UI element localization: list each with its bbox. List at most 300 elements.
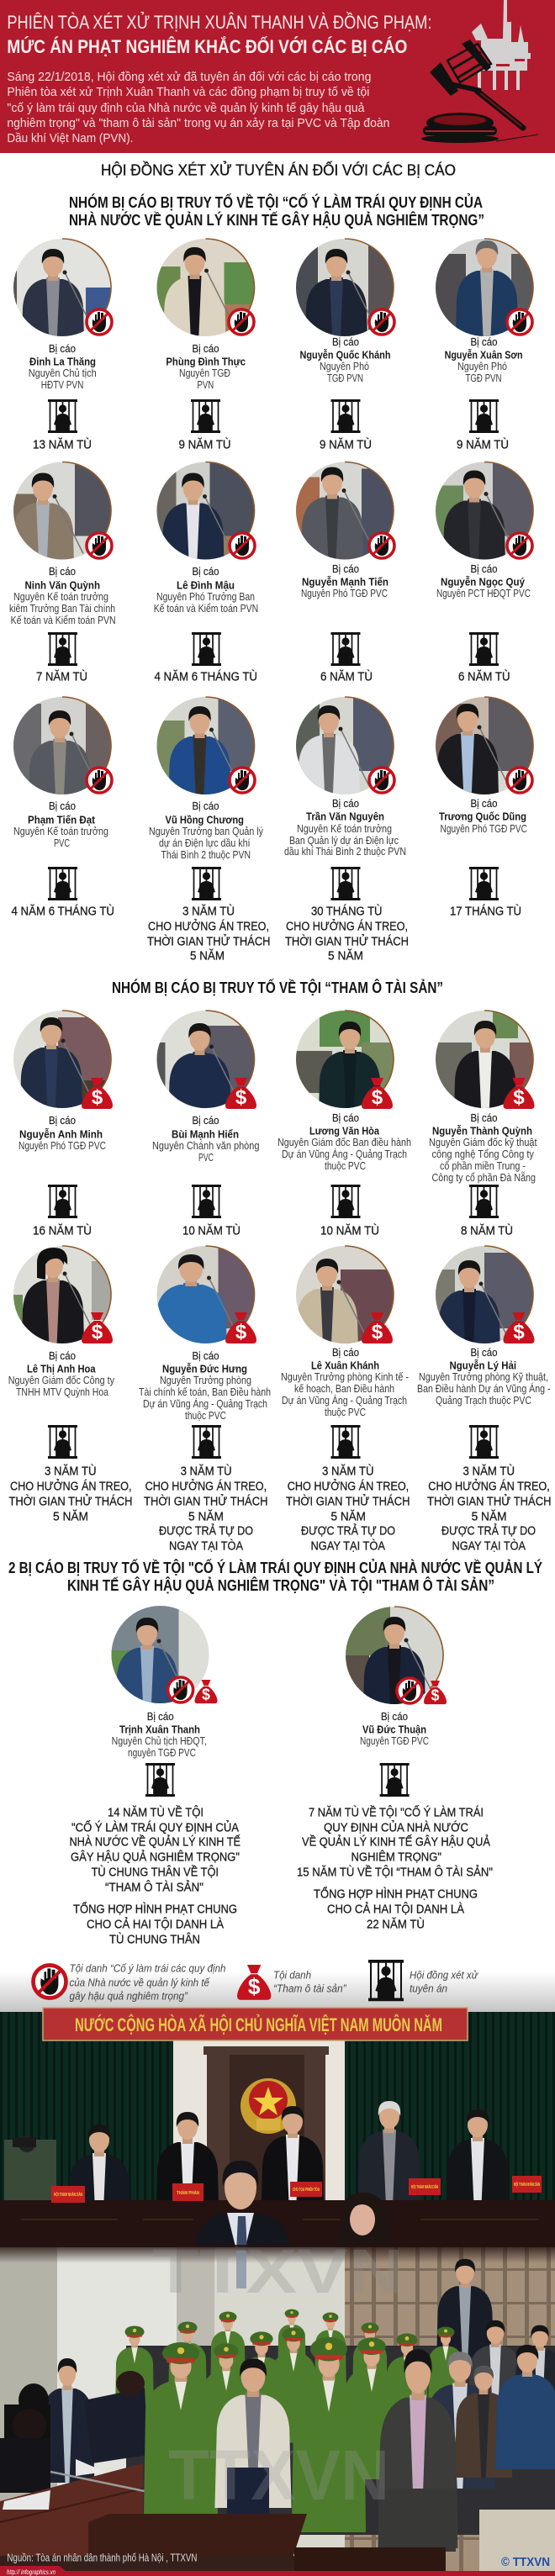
defendant text: Nguyên Kế toán trưởng <box>297 823 392 835</box>
defendant text: Công ty cổ phần Đà Nẵng <box>432 1171 536 1184</box>
card: Vũ Đức Thuận <box>297 1605 493 1932</box>
sentence: 9 NĂM TÙ <box>178 437 230 452</box>
defendant text: Bị cáo <box>49 343 76 355</box>
defendant text: Bị cáo <box>192 800 219 812</box>
sentence <box>144 1465 267 1554</box>
defendant text: thuộc PVC <box>325 1160 366 1172</box>
icon: money bag <box>82 1078 113 1109</box>
defendant text: Bị cáo <box>192 566 219 578</box>
sentence: 10 NĂM TÙ <box>320 1224 379 1238</box>
defendant text: Đinh La Thăng <box>29 355 96 368</box>
defendant text: Dự án Vũng Áng - Quảng Trạch <box>282 1394 407 1407</box>
defendant text: Bị cáo <box>192 343 219 355</box>
banner: national slogan <box>43 2008 468 2040</box>
sentence: NGAY TẠI TÒA <box>169 1539 243 1554</box>
card: Nguyễn Xuân Sơn <box>434 237 535 452</box>
icon: jail <box>192 1425 221 1459</box>
portrait <box>296 696 394 794</box>
defendant text: Nguyên Phó <box>457 361 507 372</box>
icon: jail legend <box>368 1960 404 2001</box>
sentence: TÙ CHUNG THÂN <box>109 1932 200 1947</box>
sentence: 4 NĂM 6 THÁNG TÙ <box>12 905 114 918</box>
portrait <box>109 1604 210 1742</box>
heading: group 1: NHÓM BỊ CÁO BỊ TRUY TỐ VỀ TỘI “CỐ Ý LÀM TRÁI QUY ĐỊNH CỦA <box>69 193 483 211</box>
defendant text: cổ phần miền Trung - <box>440 1160 526 1172</box>
card: Ninh Văn Quỳnh <box>9 461 116 684</box>
card: Lê Đình Mậu <box>154 461 258 684</box>
sentence: THỜI GIAN THỬ THÁCH <box>285 933 409 948</box>
icon: jail <box>469 1425 499 1459</box>
sentence <box>8 1465 133 1523</box>
card: Trịnh Xuân Thanh <box>69 1604 240 1947</box>
sentence: 17 THÁNG TÙ <box>450 905 521 918</box>
defendant text: Bị cáo <box>471 563 498 575</box>
defendant text: Nguyễn Xuân Sơn <box>445 348 523 362</box>
defendant text: Bị cáo <box>49 1115 76 1127</box>
defendant text: Nguyên Trưởng ban Quản lý <box>149 826 264 837</box>
sentence: ĐƯỢC TRẢ TỰ DO <box>441 1523 536 1539</box>
sentence: 9 NĂM TÙ <box>457 437 509 452</box>
icon: money bag <box>362 1312 393 1343</box>
icon: jail <box>331 867 360 900</box>
defendant text: Tài chính kế toán, Ban Điều hành <box>139 1386 271 1398</box>
sentence <box>297 1804 493 1932</box>
defendant text: Nguyễn Mạnh Tiến <box>302 575 388 589</box>
intro paragraph: "cố ý làm trái quy định của Nhà nước về quản lý kinh tế gây hậu quả <box>7 102 365 115</box>
defendant text: PVC <box>198 1152 214 1164</box>
legend text: abuse of regulations: của Nhà nước về quản lý kinh tế <box>69 1976 210 1989</box>
defendant text: Kế toán và Kiểm toán PVN <box>11 615 116 626</box>
defendant text: Nguyên Chánh văn phòng <box>152 1140 260 1152</box>
footer strip <box>0 2566 555 2576</box>
portrait <box>13 1245 112 1343</box>
defendant text: Bị cáo <box>332 1347 359 1359</box>
heading: group 2: NHÓM BỊ CÁO BỊ TRUY TỐ VỀ TỘI “THAM Ô TÀI SẢN” <box>112 979 443 996</box>
sentence: TỔNG HỢP HÌNH PHẠT CHUNG <box>314 1887 478 1902</box>
defendant text: Nguyên Phó TGĐ PVC <box>301 588 388 599</box>
legend text: abuse of regulations: Tội danh “Cố ý làm trái các quy định <box>69 1962 225 1974</box>
icon: jail <box>331 1425 360 1459</box>
portrait <box>344 1605 445 1741</box>
defendant text <box>301 563 388 599</box>
defendant text: Ninh Văn Quỳnh <box>25 578 100 592</box>
source line: Nguồn: Tòa án nhân dân thành phố Hà Nội , TTXVN <box>7 2552 197 2564</box>
sentence: ĐƯỢC TRẢ TỰ DO <box>159 1523 253 1539</box>
defendant text <box>278 1112 411 1172</box>
sentence: 8 NĂM TÙ <box>461 1224 513 1238</box>
sentence: QUY ĐỊNH CỦA NHÀ NƯỚC <box>324 1819 468 1834</box>
defendant text <box>299 336 391 384</box>
sentence: ĐƯỢC TRẢ TỰ DO <box>301 1523 395 1539</box>
icon: no entry <box>230 768 255 793</box>
legend text: embezzlement: Tội danh <box>273 1969 311 1981</box>
defendant text: Nguyên Chủ tịch HĐQT, <box>112 1735 207 1747</box>
sentence: 15 NĂM TÙ VỀ TỘI “THAM Ô TÀI SẢN" <box>297 1865 493 1880</box>
portrait <box>436 1010 534 1108</box>
sentence: CHO CẢ HAI TỘI DANH LÀ <box>327 1902 464 1917</box>
defendant text: Nguyên TGĐ PVC <box>360 1735 429 1747</box>
defendant text: Nguyên Kế toán trưởng <box>13 826 108 837</box>
icon: no entry <box>87 309 112 335</box>
heading: group 1 <box>69 193 484 229</box>
icon: no entry <box>87 768 112 793</box>
defendant text <box>284 798 406 858</box>
defendant text: dự án Điện lực dầu khí <box>159 837 251 849</box>
sentence: CHO CẢ HAI TỘI DANH LÀ <box>87 1917 224 1932</box>
defendant text: Thái Bình 2 thuộc PVN <box>161 849 251 861</box>
defendant text <box>152 1115 260 1164</box>
defendant text: dầu khí Thái Bình 2 thuộc PVN <box>284 846 406 858</box>
defendant text: TGĐ PVN <box>466 372 501 384</box>
defendant text: Nguyên Phó TGĐ PVC <box>441 823 527 835</box>
icon: jail <box>192 632 221 666</box>
sentence: VỀ QUẢN LÝ KINH TẾ GÂY HẬU QUẢ <box>302 1834 490 1850</box>
intro paragraph: nghiêm trọng" và "tham ô tài sản" trong vụ án xảy ra tại PVC và Tập đoàn <box>7 117 389 130</box>
heading: group 1: NHÀ NƯỚC VỀ QUẢN LÝ KINH TẾ GÂY HẬU QUẢ NGHIÊM TRỌNG” <box>69 211 484 229</box>
card: Trần Văn Nguyên <box>284 695 409 963</box>
sentence: CHO HƯỞNG ÁN TREO, <box>145 1478 267 1493</box>
card: Đinh La Thăng <box>12 237 113 452</box>
defendant text: PVN <box>197 379 214 391</box>
sentence: 6 NĂM TÙ <box>320 669 373 684</box>
icon: no entry <box>230 533 255 558</box>
defendant text: Nguyên Kế toán trưởng <box>13 591 108 603</box>
defendant text <box>8 1350 115 1398</box>
icon: no entry legend <box>34 1966 66 1998</box>
sentence: NGHIÊM TRỌNG" <box>352 1850 441 1865</box>
defendant text: Bị cáo <box>332 336 359 348</box>
defendant text: Bị cáo <box>471 336 498 348</box>
defendant text: Bị cáo <box>192 1115 219 1127</box>
defendant text: Lê Xuân Khánh <box>311 1359 379 1372</box>
photo: defendants and police in court <box>0 2245 555 2576</box>
sentence: 3 NĂM TÙ <box>181 1465 232 1478</box>
defendant text <box>281 1347 409 1418</box>
portrait <box>436 238 534 336</box>
name plates: CHỦ TỌA PHIÊN TÒA <box>293 2186 320 2193</box>
sentence <box>69 1806 240 1947</box>
sentence: 30 THÁNG TÙ <box>311 905 382 918</box>
portrait <box>156 1010 256 1108</box>
defendant text: Vũ Hồng Chương <box>165 814 244 826</box>
portrait <box>13 461 112 560</box>
defendant text: Bị cáo <box>49 800 76 812</box>
portrait <box>156 461 256 560</box>
heading: court verdict: HỘI ĐỒNG XÉT XỬ TUYÊN ÁN ĐỐI VỚI CÁC BỊ CÁO <box>101 161 456 178</box>
icon: jail <box>48 867 77 900</box>
defendant text: Bùi Mạnh Hiển <box>172 1128 239 1140</box>
icon: money bag <box>503 1312 535 1343</box>
icon: jail <box>192 867 221 900</box>
icon: no entry <box>369 533 394 558</box>
icon: no entry <box>507 533 532 558</box>
sentence: THỜI GIAN THỬ THÁCH <box>147 933 271 948</box>
defendant text: Bị cáo <box>332 1112 359 1124</box>
icon: jail <box>48 1185 77 1218</box>
portrait <box>436 461 534 560</box>
defendant text <box>13 800 108 849</box>
defendant text: Nguyên Phó Trưởng Ban <box>156 591 255 603</box>
sentence: CHO HƯỞNG ÁN TREO, <box>148 918 269 933</box>
defendant text <box>166 343 246 391</box>
defendant text <box>149 800 264 861</box>
icon: money bag <box>195 1680 218 1703</box>
portrait <box>296 1010 394 1108</box>
portrait <box>13 1010 112 1108</box>
legend text: abuse of regulations <box>69 1962 225 2003</box>
icon: money bag <box>424 1681 447 1704</box>
icon: jail <box>48 632 77 666</box>
defendant text <box>439 798 527 835</box>
intro paragraph: Phiên tòa xét xử Trịnh Xuân Thanh và các đồng phạm bị truy tố về tội <box>7 86 369 99</box>
icon: money bag <box>503 1078 535 1109</box>
card: Lương Văn Hòa <box>278 1009 411 1238</box>
defendant text: PVC <box>54 837 70 849</box>
defendant text <box>139 1350 271 1422</box>
icon: money bag <box>225 1078 256 1109</box>
defendant text: Nguyên Giám đốc Ban điều hành <box>278 1137 411 1148</box>
legend text: abuse of regulations: gây hậu quả nghiêm trọng” <box>69 1989 188 2003</box>
icon: money bag <box>225 1312 256 1343</box>
name plates: THẨM PHÁN <box>177 2190 199 2196</box>
defendant text: Lê Đình Mậu <box>177 578 235 592</box>
defendant text: Nguyên TGĐ <box>179 367 230 379</box>
sentence: 5 NĂM <box>331 1510 366 1523</box>
card: Bùi Mạnh Hiển <box>152 1009 260 1238</box>
defendant text: Ban Quản lý dự án Điện lực <box>289 835 399 847</box>
sentence: 6 NĂM TÙ <box>458 669 510 684</box>
defendant text <box>429 1112 537 1184</box>
sentence: NGAY TẠI TÒA <box>311 1539 385 1554</box>
portrait <box>296 461 394 560</box>
sentence: 9 NĂM TÙ <box>320 437 372 452</box>
sentence: CHO HƯỞNG ÁN TREO, <box>286 918 408 933</box>
defendant text: Bị cáo <box>471 1112 498 1124</box>
defendant text: Bị cáo <box>192 1350 219 1362</box>
defendant text: Nguyên Giám đốc kỹ thuật <box>429 1137 537 1148</box>
sentence: TỔNG HỢP HÌNH PHẠT CHUNG <box>73 1902 237 1917</box>
defendant text: Bị cáo <box>332 563 359 575</box>
defendant text: Trịnh Xuân Thanh <box>119 1723 200 1735</box>
defendant text: Dự án Vũng Áng - Quảng Trạch <box>143 1397 267 1410</box>
sentence: THỜI GIAN THỬ THÁCH <box>8 1493 133 1508</box>
defendant text: thuộc PVC <box>325 1407 366 1418</box>
defendant text: Bị cáo <box>471 798 498 810</box>
defendant text: Nguyên Trưởng phòng <box>160 1375 251 1386</box>
name plates: HỘI THẨM NHÂN DÂN <box>54 2191 82 2198</box>
icon: no entry <box>369 768 394 793</box>
icon: oil rig and gavel <box>421 0 538 143</box>
defendant text <box>445 336 523 384</box>
sentence: NGAY TẠI TÒA <box>452 1539 526 1554</box>
portrait <box>13 696 112 794</box>
watermark top: TTXVN <box>152 2236 404 2306</box>
intro paragraph: Sáng 22/1/2018, Hội đồng xét xử đã tuyên án đối với các bị cáo trong <box>7 71 371 84</box>
defendant text: Trần Văn Nguyên <box>306 810 384 822</box>
icon: no entry <box>507 768 532 793</box>
icon: jail <box>48 1425 77 1459</box>
defendant text: Quảng Trạch thuộc PVC <box>436 1395 531 1407</box>
defendant text: Nguyên PCT HĐQT PVC <box>436 588 531 599</box>
defendant text: TNHH MTV Quỳnh Hoa <box>16 1386 108 1398</box>
portrait <box>296 238 394 336</box>
icon: no entry <box>229 309 254 335</box>
defendant text: Nguyễn Quốc Khánh <box>299 348 391 362</box>
sentence: 5 NĂM <box>53 1510 88 1523</box>
defendant text: Kế toán và Kiểm toán PVN <box>154 603 258 615</box>
heading: group 3 <box>8 1559 542 1594</box>
legend text: verdict: tuyên án <box>410 1982 447 1994</box>
card: Phạm Tiến Đạt <box>12 695 114 918</box>
defendant text: Bị cáo <box>381 1711 408 1723</box>
defendant text: Dự án Vũng Áng - Quảng Trạch <box>282 1148 407 1160</box>
legend <box>34 1960 478 2003</box>
defendant text <box>112 1711 207 1759</box>
defendant text: thuộc PVC <box>185 1410 226 1422</box>
sentence: 10 NĂM TÙ <box>182 1224 240 1238</box>
icon: jail <box>48 399 77 433</box>
icon: no entry <box>507 309 532 335</box>
sentence: 14 NĂM TÙ VỀ TỘI <box>108 1806 204 1819</box>
sentence: 5 NĂM <box>472 1510 507 1523</box>
logo: TTXVN: © TTXVN <box>501 2555 550 2569</box>
icon: money bag <box>362 1078 393 1109</box>
card: Nguyễn Lý Hải <box>417 1244 552 1554</box>
legend text: verdict <box>410 1969 478 1994</box>
intro paragraph: Dầu khí Việt Nam (PVN). <box>7 132 133 145</box>
heading: group 3: KINH TẾ GÂY HẬU QUẢ NGHIÊM TRỌNG" VÀ TỘI "THAM Ô TÀI SẢN” <box>67 1576 494 1594</box>
icon: no entry <box>369 309 394 335</box>
defendant text: Nguyễn Lý Hải <box>449 1359 516 1372</box>
defendant text: Bị cáo <box>49 566 76 578</box>
defendant text: Phạm Tiến Đạt <box>28 814 96 826</box>
defendant text: Phùng Đình Thực <box>166 355 246 368</box>
defendant text: Bị cáo <box>147 1711 174 1723</box>
sentence: NHÀ NƯỚC VỀ QUẢN LÝ KINH TẾ <box>69 1834 240 1850</box>
icon: jail <box>469 867 499 900</box>
sentence: CHO HƯỞNG ÁN TREO, <box>10 1478 131 1493</box>
defendant text: Nguyên Phó TGĐ PVC <box>18 1140 106 1152</box>
icon: money bag <box>82 1312 113 1343</box>
name plates <box>51 2176 542 2203</box>
title line 1: PHIÊN TÒA XÉT XỬ TRỊNH XUÂN THANH VÀ ĐỒNG PHẠM: <box>7 12 431 33</box>
defendant text <box>417 1347 550 1407</box>
sentence: 16 NĂM TÙ <box>33 1224 92 1238</box>
defendant text: Nguyên Phó <box>320 361 369 372</box>
defendant text: Bị cáo <box>49 1350 76 1362</box>
icon: money bag legend <box>237 1965 271 2000</box>
sentence: 3 NĂM TÙ <box>182 905 235 918</box>
defendant text <box>154 566 258 615</box>
sentence <box>286 1465 410 1554</box>
defendant text: TGĐ PVN <box>327 372 363 384</box>
defendant text <box>9 566 116 626</box>
sentence: 13 NĂM TÙ <box>33 437 92 452</box>
defendant text: Bị cáo <box>332 798 359 810</box>
defendant text: Nguyên Trưởng phòng Kinh tế - <box>281 1371 409 1383</box>
icon: no entry <box>168 1677 193 1702</box>
card: Nguyễn Đức Hưng <box>139 1244 271 1554</box>
defendant text: công nghệ Tổng Công ty <box>432 1148 535 1160</box>
sentence: GÂY HẬU QUẢ NGHIÊM TRỌNG" <box>71 1850 240 1865</box>
portrait <box>296 1245 394 1343</box>
legend text: verdict: Hội đồng xét xử <box>410 1969 478 1981</box>
sentence <box>285 905 409 963</box>
defendant text: Vũ Đức Thuận <box>362 1723 426 1735</box>
card: Nguyễn Mạnh Tiến <box>294 461 395 684</box>
defendant text: Nguyễn Ngọc Quý <box>441 575 526 589</box>
sentence <box>427 1465 552 1554</box>
sentence <box>147 905 271 963</box>
watermark bottom: TTXVN <box>168 2436 389 2515</box>
sentence: “THAM Ô TÀI SẢN" <box>105 1880 204 1895</box>
legend text: embezzlement <box>273 1969 346 1994</box>
portrait <box>156 696 256 794</box>
card: Trương Quốc Dũng <box>434 695 535 918</box>
sentence: 4 NĂM 6 THÁNG TÙ <box>155 669 257 684</box>
intro paragraph <box>7 71 389 145</box>
card: Nguyễn Quốc Khánh <box>294 237 395 452</box>
defendant text: Lê Thị Anh Hoa <box>27 1362 96 1375</box>
defendant text: Lương Văn Hòa <box>309 1125 380 1137</box>
sentence: CHO HƯỞNG ÁN TREO, <box>288 1478 409 1493</box>
defendant text <box>436 563 531 599</box>
icon: jail <box>145 1763 175 1797</box>
sentence: TÙ CHUNG THÂN VỀ TỘI <box>92 1865 219 1880</box>
defendant text: HĐTV PVN <box>41 379 83 391</box>
defendant text: kế hoạch, Ban Điều hành <box>294 1383 394 1395</box>
legend text: embezzlement: “Tham ô tài sản” <box>273 1982 346 1994</box>
icon: jail <box>331 399 360 433</box>
defendant text <box>29 343 97 391</box>
sentence: 3 NĂM TÙ <box>45 1465 96 1478</box>
sentence: THỜI GIAN THỬ THÁCH <box>144 1493 267 1508</box>
icon: jail <box>331 1185 360 1218</box>
portrait <box>156 1245 256 1343</box>
photo: courtroom judges <box>0 1972 555 2253</box>
name plates: HỘI THẨM NHÂN DÂN <box>411 2183 438 2190</box>
defendant text: Nguyên Chủ tịch <box>29 367 97 379</box>
defendant text: Trương Quốc Dũng <box>439 810 526 822</box>
portrait <box>436 1245 534 1343</box>
defendant text: Bị cáo <box>471 1347 498 1359</box>
header panel <box>0 0 555 153</box>
sentence: 3 NĂM TÙ <box>462 1465 515 1478</box>
card: Lê Thị Anh Hoa <box>8 1244 133 1523</box>
card: Lê Xuân Khánh <box>281 1244 410 1554</box>
card: Phùng Đình Thực <box>155 237 256 452</box>
sentence: 5 NĂM <box>328 948 363 963</box>
portrait <box>13 238 112 336</box>
defendant text: Nguyên Giám đốc Công ty <box>8 1375 115 1386</box>
sentence: "CỐ Ý LÀM TRÁI QUY ĐỊNH CỦA <box>71 1819 239 1834</box>
defendant text <box>360 1711 429 1747</box>
sentence: 7 NĂM TÙ VỀ TỘI "CỐ Ý LÀM TRÁI <box>309 1804 484 1819</box>
icon: jail <box>469 632 499 666</box>
sentence: 7 NĂM TÙ <box>36 669 87 684</box>
icon: jail <box>469 1185 499 1218</box>
sentence: THỜI GIAN THỬ THÁCH <box>286 1493 410 1508</box>
icon: no entry <box>87 533 112 558</box>
icon: jail <box>331 632 360 666</box>
defendant text: Nguyễn Đức Hưng <box>162 1362 247 1375</box>
defendant text: Nguyễn Anh Minh <box>19 1128 103 1140</box>
card: Nguyễn Thành Quỳnh <box>429 1009 537 1238</box>
icon: no entry <box>397 1678 422 1703</box>
icon: jail <box>192 1185 221 1218</box>
icon: jail <box>469 399 499 433</box>
title line 2: MỨC ÁN PHẠT NGHIÊM KHẮC ĐỐI VỚI CÁC BỊ CÁO <box>7 35 407 57</box>
